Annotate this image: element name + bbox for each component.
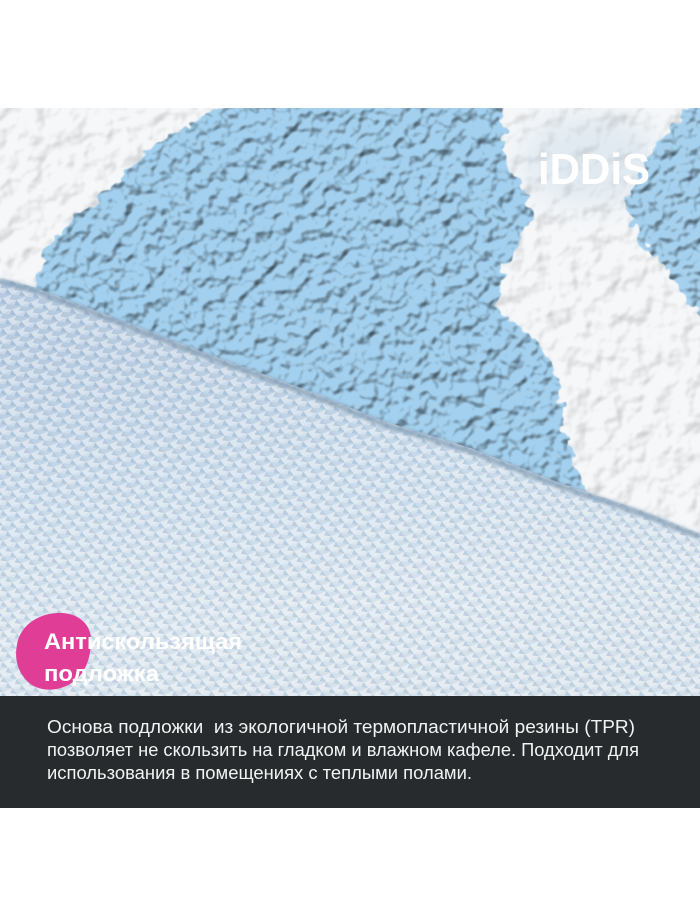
blue pile stripe xyxy=(35,108,586,492)
second blue stripe at right edge xyxy=(625,100,700,330)
description text: Основа подложки из экологичной термопластичной резины (TPR) xyxy=(47,717,635,737)
description text: использования в помещениях с теплыми полами. xyxy=(47,763,472,783)
logo: IDDIS: ® xyxy=(648,144,655,154)
product photo: bath mat with anti-slip backing xyxy=(0,90,700,696)
heading: anti-slip backing: подложка xyxy=(44,661,160,686)
shadow under mat edge xyxy=(0,281,700,537)
white pile of the mat xyxy=(0,108,700,534)
logo: IDDIS: iDDiS xyxy=(538,145,650,194)
blue tint around logo xyxy=(520,115,660,205)
pink accent blob xyxy=(16,613,91,690)
dark description band xyxy=(0,696,700,808)
description text xyxy=(47,717,639,783)
rubber backing xyxy=(0,278,700,696)
infographic canvas xyxy=(0,108,700,808)
heading: anti-slip backing: Антискользящая xyxy=(44,629,242,654)
description text: позволяет не скользить на гладком и влажном кафеле. Подходит для xyxy=(47,740,639,760)
heading: anti-slip backing xyxy=(44,629,242,686)
